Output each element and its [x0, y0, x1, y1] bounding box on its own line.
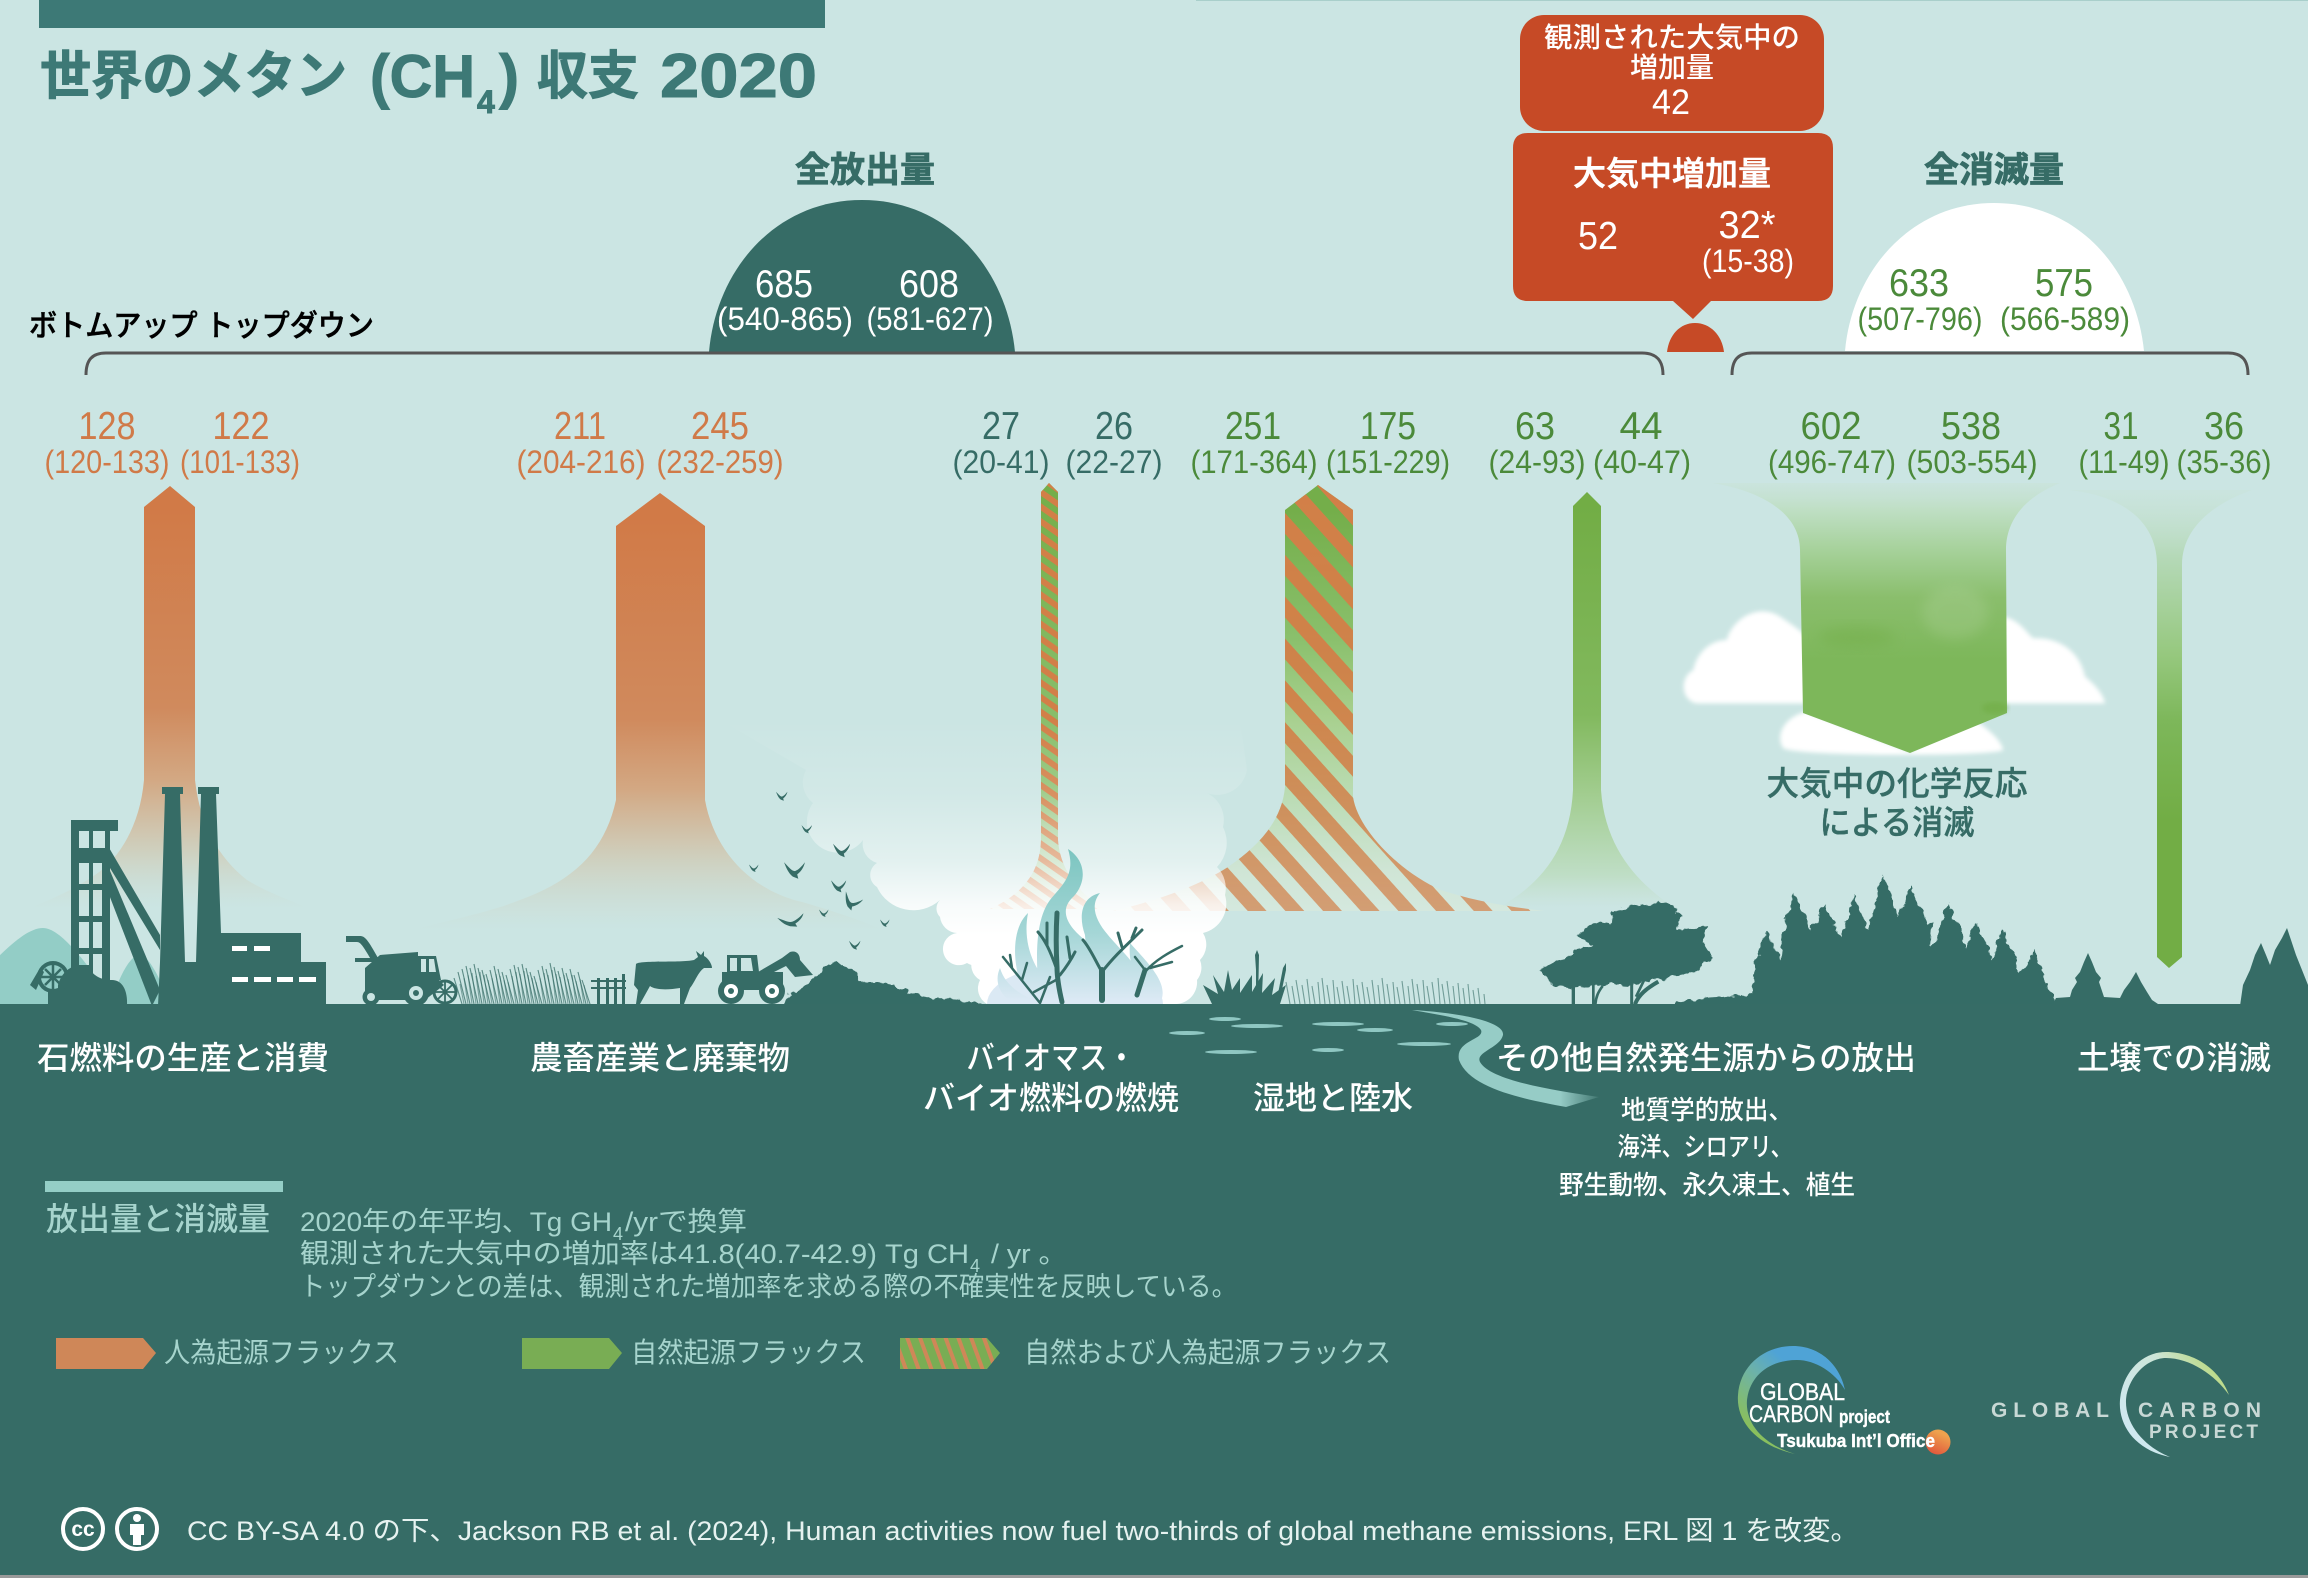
values: chemical loss — [1768, 405, 2038, 480]
notes text: 4 — [613, 1224, 623, 1244]
values: soil uptake — [2078, 405, 2272, 480]
arrow: other natural flux — [1498, 492, 1675, 908]
title: 2020 — [660, 42, 817, 111]
title: ) — [499, 43, 519, 110]
dome: atmospheric growth — [1667, 323, 1724, 352]
logo: Global Carbon Project: GLOBAL — [1991, 1399, 2109, 1422]
dome: total sinks: (566-589) — [2000, 301, 2130, 337]
atmospheric growth callout: 32* — [1718, 204, 1776, 247]
wetland water ripples — [1169, 1017, 1468, 1054]
logo: Global Carbon Project: PROJECT — [2149, 1422, 2258, 1443]
values: biomass burning: 27 — [982, 405, 1020, 448]
chemical loss label — [1766, 765, 2028, 841]
icon: harvester — [346, 936, 456, 1006]
values: soil uptake: (35-36) — [2176, 444, 2272, 480]
values: other natural: 44 — [1620, 405, 1662, 448]
icon: reeds — [1203, 950, 1286, 1004]
river — [1412, 1010, 1599, 1107]
fire base glow — [987, 964, 1163, 1044]
heading: total sinks: 全消滅量 — [1924, 151, 2064, 190]
logo: Global Carbon Project: CARBON — [2138, 1399, 2261, 1422]
values: agriculture and waste: (232-259) — [656, 444, 784, 480]
icon: fence — [591, 974, 626, 1004]
values: soil uptake: (11-49) — [2078, 444, 2170, 480]
arrow: wetlands flux — [1113, 485, 1544, 911]
icon: tractor — [718, 951, 813, 1004]
notes text: 観測された大気中の増加率は41.8(40.7-42.9) Tg CH — [300, 1239, 969, 1269]
title: 世界のメタン — [40, 48, 347, 106]
values: agriculture and waste: (204-216) — [516, 444, 646, 480]
values: wetlands — [1190, 405, 1450, 480]
values: fossil fuels — [44, 405, 300, 480]
legend: natural: 自然起源フラックス — [631, 1337, 866, 1368]
values: biomass burning: (20-41) — [952, 444, 1050, 480]
category label: biomass burning: バイオ燃料の燃焼 — [923, 1080, 1179, 1116]
values: chemical loss: (496-747) — [1768, 444, 1896, 480]
values: biomass burning — [952, 405, 1162, 480]
values: fossil fuels: 128 — [78, 405, 136, 448]
values: agriculture and waste — [516, 405, 784, 480]
title: 収支 — [537, 48, 639, 106]
category label: other natural: その他自然発生源からの放出 — [1496, 1040, 1916, 1076]
values: agriculture and waste: 211 — [554, 405, 606, 448]
values: other natural — [1488, 405, 1691, 480]
legend: anthropogenic — [56, 1337, 399, 1369]
logo: Global Carbon Project Tsukuba: CARBON — [1749, 1401, 1833, 1428]
values: wetlands: (171-364) — [1190, 444, 1318, 480]
clouds behind chemical loss arrow — [1684, 611, 2105, 755]
category label: wetlands: 湿地と陸水 — [1253, 1080, 1413, 1116]
category label: agriculture and waste: 農畜産業と廃棄物 — [530, 1040, 790, 1076]
title: 4 — [477, 84, 495, 120]
dome: total sinks: 633 — [1889, 262, 1949, 305]
values: wetlands: 251 — [1225, 405, 1281, 448]
notes text: トップダウンとの差は、観測された増加率を求める際の不確実性を反映している。 — [300, 1272, 1237, 1302]
values: soil uptake: 36 — [2204, 405, 2244, 448]
dome: total emissions: (540-865) — [717, 301, 853, 337]
dome: total sinks: (507-796) — [1858, 301, 1982, 337]
notes accent bar — [45, 1181, 283, 1192]
observed atmospheric growth box: 増加量 — [1630, 52, 1714, 83]
arrow: fossil fuels flux — [30, 486, 307, 908]
legend: anthropogenic: 人為起源フラックス — [164, 1337, 399, 1368]
atmospheric growth callout: 52 — [1578, 215, 1618, 258]
logo: Global Carbon Project Tsukuba: Tsukuba Int’l Office — [1777, 1431, 1935, 1451]
values: fossil fuels: (101-133) — [180, 444, 300, 480]
dome: total sinks: 575 — [2035, 262, 2093, 305]
dome: total emissions: 608 — [899, 263, 959, 306]
heading: total emissions: 全放出量 — [795, 151, 935, 190]
ground — [0, 1004, 2308, 1578]
icon: broadleaf tree — [1538, 902, 1712, 1004]
other natural source list: 海洋、シロアリ、 — [1618, 1132, 1792, 1162]
icon: conifer forest — [1657, 875, 2060, 1017]
credit line: CC BY-SA 4.0 の下、Jackson RB et al. (2024), Human activities now fuel two-thirds of global methane emissions, ERL 図 1 を改変。 — [187, 1516, 1859, 1546]
values: other natural: (40-47) — [1593, 444, 1691, 480]
logo: Global Carbon Project Tsukuba: GLOBAL — [1760, 1379, 1845, 1406]
chemical loss label: 大気中の化学反応 — [1766, 765, 2028, 802]
atmospheric growth callout: 大気中増加量 — [1573, 155, 1771, 192]
notes text: /yrで換算 — [625, 1207, 747, 1237]
icon: creative commons: cc — [71, 1518, 95, 1541]
arrow: chemical loss sink — [1713, 483, 2060, 753]
icon: small conifers — [2052, 928, 2308, 1006]
values: other natural: 63 — [1515, 405, 1555, 448]
title — [40, 42, 817, 120]
icon: birds — [749, 792, 890, 950]
atmospheric growth callout: (15-38) — [1702, 243, 1794, 279]
values: chemical loss: (503-554) — [1906, 444, 2038, 480]
values: fossil fuels: 122 — [212, 405, 270, 448]
bracket: sources — [86, 353, 1663, 375]
dome: total emissions: (581-627) — [866, 301, 994, 337]
values: chemical loss: 602 — [1800, 405, 1862, 448]
atmospheric growth callout — [1513, 133, 1833, 319]
icon: coal mine headframe and factory — [30, 787, 326, 1006]
notes text: / yr 。 — [991, 1239, 1067, 1269]
observed atmospheric growth box — [1520, 15, 1824, 131]
notes heading: 放出量と消滅量 — [46, 1201, 270, 1237]
icon: creative commons — [63, 1509, 157, 1549]
icon: dead trees — [1003, 913, 1182, 1003]
values: biomass burning: 26 — [1095, 405, 1133, 448]
notes text: 2020年の年平均、Tg GH — [300, 1207, 612, 1237]
values: soil uptake: 31 — [2104, 405, 2138, 448]
legend: natural — [522, 1337, 866, 1369]
logo: Global Carbon Project — [1991, 1352, 2261, 1457]
crops field — [454, 963, 590, 1004]
values: agriculture and waste: 245 — [691, 405, 749, 448]
legend: natural and anthropogenic: 自然および人為起源フラックス — [1024, 1337, 1391, 1368]
values: wetlands: (151-229) — [1326, 444, 1450, 480]
values: fossil fuels: (120-133) — [44, 444, 170, 480]
smoke plume — [720, 720, 1247, 1004]
dome: total emissions: 685 — [755, 263, 813, 306]
logo: Global Carbon Project Tsukuba — [1738, 1346, 1950, 1454]
category label: soil uptake: 土壌での消滅 — [2077, 1040, 2271, 1076]
notes text — [300, 1207, 1237, 1302]
title: (CH — [370, 43, 475, 110]
values: wetlands: 175 — [1360, 405, 1416, 448]
values: other natural: (24-93) — [1488, 444, 1586, 480]
marsh grass — [1286, 978, 1485, 1004]
arrow: agriculture and waste flux — [412, 493, 883, 930]
notes text: 4 — [970, 1256, 980, 1276]
other natural source list — [1559, 1095, 1855, 1200]
arrow: soil uptake sink — [2068, 490, 2252, 968]
arrow: biomass burning flux — [990, 483, 1105, 909]
observed atmospheric growth box: 観測された大気中の — [1544, 22, 1800, 53]
dome: total sinks — [1845, 203, 2144, 351]
icon: cow — [634, 951, 712, 1004]
hills behind factory — [0, 928, 170, 1004]
bracket: sinks — [1732, 353, 2248, 375]
other natural source list: 地質学的放出、 — [1621, 1095, 1793, 1125]
other natural source list: 野生動物、永久凍土、植生 — [1559, 1170, 1855, 1200]
dome: total emissions — [709, 200, 1015, 352]
legend: natural and anthropogenic — [900, 1337, 1391, 1369]
dirt pile — [780, 962, 990, 1012]
chemical loss label: による消滅 — [1820, 804, 1974, 841]
values: chemical loss: 538 — [1941, 405, 2001, 448]
category label: biomass burning: バイオマス・ — [966, 1040, 1136, 1076]
observed atmospheric growth box: 42 — [1652, 83, 1690, 122]
title bar — [39, 0, 825, 28]
category label: biomass burning — [923, 1040, 1179, 1116]
logo: Global Carbon Project Tsukuba: project — [1839, 1407, 1890, 1427]
icon: flames — [998, 849, 1163, 1003]
values: biomass burning: (22-27) — [1066, 444, 1162, 480]
category label: fossil fuels: 石燃料の生産と消費 — [37, 1040, 329, 1076]
bottom-up / top-down label: ボトムアップ トップダウン — [29, 310, 374, 343]
